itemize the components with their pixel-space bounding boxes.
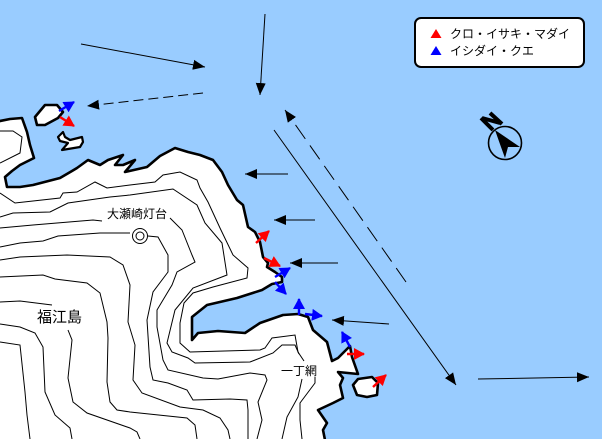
arrow: coast 3	[290, 262, 338, 264]
legend: blue species: イシダイ・クエ	[450, 43, 534, 58]
contour lines	[0, 131, 315, 439]
legend: red marker	[430, 29, 442, 38]
arrow: north inflow	[260, 14, 265, 95]
arrow: dashed return current	[285, 110, 406, 282]
land: Fukue island coastline	[0, 118, 358, 439]
arrow: dashed to islets	[87, 93, 203, 106]
legend: red species: クロ・イサキ・マダイ	[450, 26, 570, 41]
current arrows	[81, 14, 589, 385]
legend	[415, 18, 584, 67]
islet: upper small island	[35, 105, 63, 125]
icon: lighthouse symbol	[132, 228, 148, 244]
islet: southern round island	[353, 377, 378, 397]
arrow: long offshore current	[274, 130, 456, 385]
icon: north compass	[481, 113, 522, 160]
arrow: northwest inflow	[81, 44, 205, 67]
legend: blue marker	[430, 46, 442, 55]
blue fish arrows	[59, 102, 350, 347]
arrow: coast 1	[245, 173, 288, 175]
label: Itchoami: 一丁網	[281, 364, 317, 378]
islet: second small island	[58, 132, 83, 150]
label: Fukue island: 福江島	[37, 309, 82, 326]
red fish arrows	[60, 117, 386, 387]
arrow: coast 2	[274, 219, 315, 221]
label: lighthouse: 大瀬崎灯台	[107, 206, 167, 221]
arrow: outflow east	[478, 377, 589, 379]
arrow: coast 4	[332, 320, 389, 324]
